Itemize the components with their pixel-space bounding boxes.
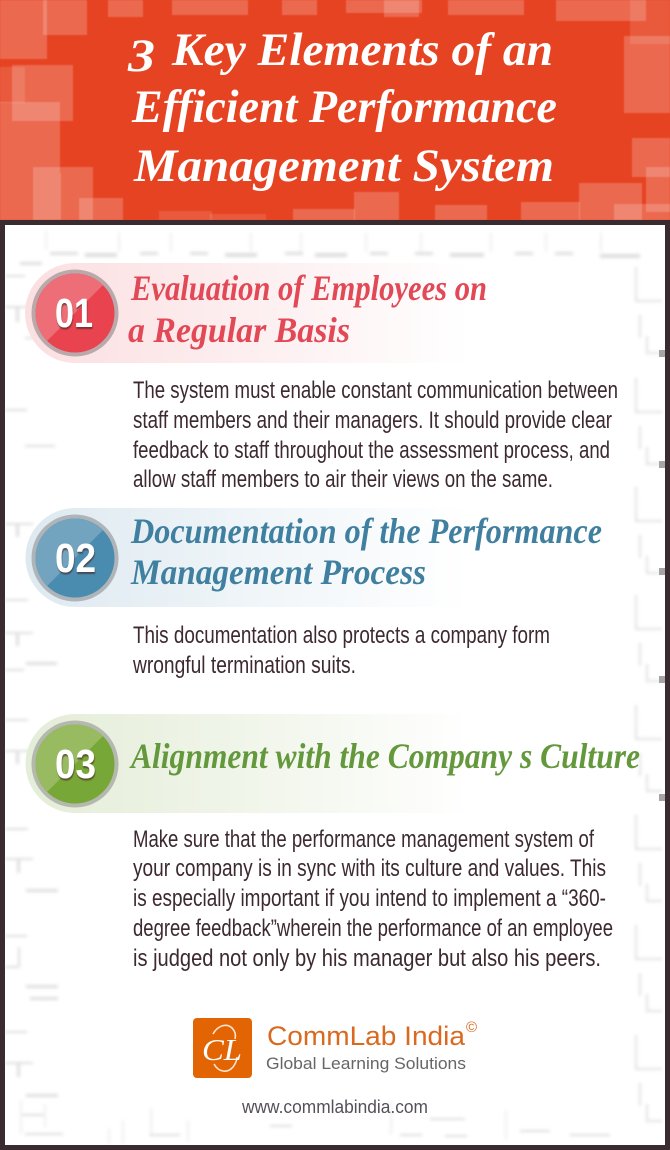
body text 2 xyxy=(132,622,550,679)
content panel xyxy=(5,225,665,1145)
body text 1: allow staff members to air their views on the same. xyxy=(133,466,553,493)
heading 2: Documentation of the Performance xyxy=(130,511,602,551)
number badge 02: 02 xyxy=(55,535,96,581)
number badge 02 xyxy=(32,514,118,602)
icon: CL mark: CL xyxy=(202,1032,242,1067)
title xyxy=(127,24,557,192)
title: 3 xyxy=(127,30,155,82)
title: Key Elements of an xyxy=(171,24,553,76)
section 1 xyxy=(20,258,618,493)
tagline: Global Learning Solutions xyxy=(266,1054,466,1073)
heading 1: Evaluation of Employees on xyxy=(130,268,487,308)
banner 2 xyxy=(26,508,470,607)
icon: CL mark xyxy=(193,1018,252,1078)
body text 2: This documentation also protects a company form xyxy=(133,622,550,649)
banner 3 xyxy=(26,714,470,813)
heading 2: Management Process xyxy=(130,552,426,592)
brand name: CommLab India xyxy=(267,1021,466,1051)
section 2 xyxy=(20,503,602,679)
number badge 03 xyxy=(32,720,118,808)
section 3 xyxy=(20,709,640,972)
number badge 01: 01 xyxy=(55,290,93,336)
website url: www.commlabindia.com xyxy=(241,1097,428,1117)
body text 3 xyxy=(133,826,613,972)
copyright mark: © xyxy=(466,1019,477,1036)
heading 1 xyxy=(128,268,487,350)
number badge 01 xyxy=(32,270,118,356)
heading 1: a Regular Basis xyxy=(128,310,350,350)
banner 1 xyxy=(25,263,470,363)
number badge 03: 03 xyxy=(55,741,96,787)
title: Efficient Performance xyxy=(131,81,557,133)
heading 2 xyxy=(130,511,602,592)
logo xyxy=(193,1018,477,1078)
body text 2: wrongful termination suits. xyxy=(132,652,356,679)
header banner xyxy=(0,0,670,220)
body text 1 xyxy=(133,377,618,493)
title: Management System xyxy=(133,140,554,192)
